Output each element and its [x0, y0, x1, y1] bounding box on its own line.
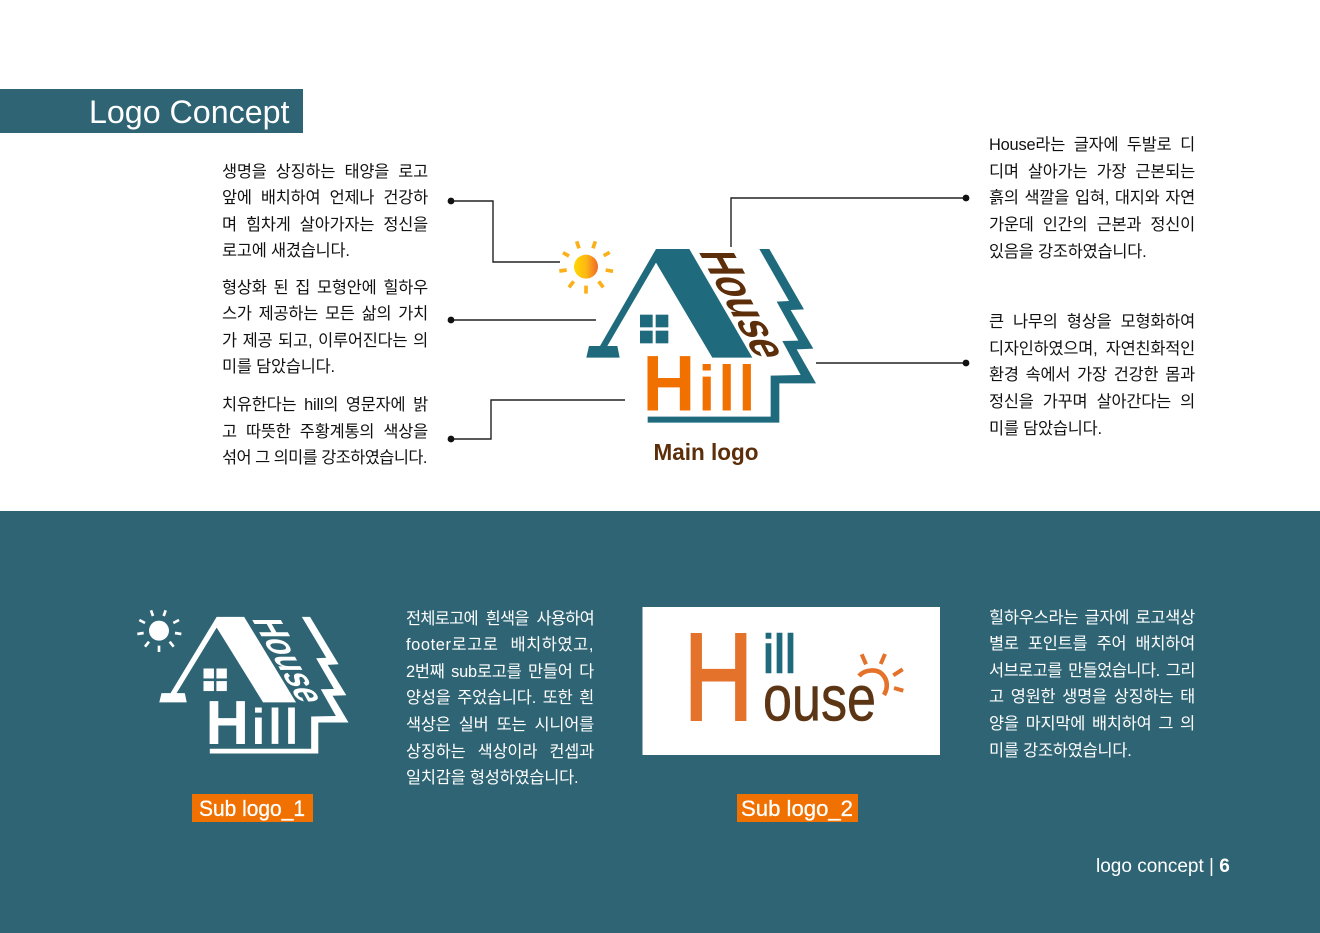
text block: sub logo 1 description: footer로고로 배치하였고,	[406, 636, 594, 654]
Hill wordmark: H	[643, 340, 695, 428]
text block: tree shape meaning: 정신을 가꾸며 살아간다는 의	[989, 393, 1195, 411]
text block: house lettering meaning: 흙의 색깔을 입혀, 대지와 자연	[989, 189, 1195, 207]
footer: page label and number: logo concept | 6	[1096, 856, 1230, 876]
text block: tree shape meaning: 디자인하였으며, 자연친화적인	[989, 340, 1195, 358]
text block: hill meaning: 고 따뜻한 주황계통의 색상을	[222, 423, 428, 441]
title banner: Logo Concept	[89, 94, 289, 130]
white Hill wordmark: H	[206, 688, 249, 757]
label: Sub logo_1: Sub logo_1	[199, 796, 305, 821]
text block: sub logo 1 description: 전체로고에 흰색을 사용하여	[406, 610, 594, 628]
text block: sub logo 2 description: 별로 포인트를 주어 배치하여	[989, 635, 1195, 653]
text block: sun meaning	[222, 163, 428, 260]
text block: house shape meaning: 스가 제공하는 모든 삶의 가치	[222, 305, 428, 323]
text block: tree shape meaning	[989, 313, 1195, 438]
text block: sub logo 2 description: 힐하우스라는 글자에 로고색상	[989, 609, 1195, 627]
label: Sub logo_2: Sub logo_2	[741, 796, 853, 821]
white Hill wordmark: ill	[252, 698, 298, 755]
text block: house lettering meaning	[989, 136, 1195, 261]
title banner	[0, 89, 303, 133]
text block: sub logo 1 description: 색상은 실버 또는 시니어를	[406, 716, 594, 734]
text block: hill meaning	[222, 396, 428, 467]
ill letters: ill	[763, 625, 796, 685]
text block: sub logo 1 description: 양성을 주었습니다. 또한 흰	[406, 689, 594, 707]
text block: house lettering meaning: 디며 살아가는 가장 근본되는	[989, 163, 1195, 181]
orange sun arc and rays	[859, 654, 903, 695]
text block: sun meaning: 앞에 배치하여 언제나 건강하	[222, 189, 428, 207]
text block: sub logo 1 description: 일치감을 형성하였습니다.	[406, 769, 578, 787]
panel: sub logo 2 white card	[642, 607, 940, 755]
connector: tree shape	[816, 360, 969, 366]
text block: sub logo 2 description: 미를 강조하였습니다.	[989, 742, 1132, 760]
icon: main logo	[559, 241, 816, 428]
tree-shaped right wall	[648, 249, 816, 423]
text block: sun meaning: 로고에 새겼습니다.	[222, 242, 350, 260]
icon: sun	[559, 241, 613, 294]
H letter: H	[684, 610, 753, 746]
text block: house lettering meaning: 가운데 인간의 근본과 정신이	[989, 216, 1195, 234]
ouse letters: ouse	[763, 662, 876, 734]
text block: tree shape meaning: 큰 나무의 형상을 모형화하여	[989, 313, 1195, 331]
panel: bottom teal section	[0, 511, 1320, 933]
white roof	[159, 617, 296, 702]
text block: sub logo 2 description	[989, 609, 1195, 760]
label: Main logo: Main logo	[654, 439, 758, 465]
window	[640, 315, 668, 343]
icon: sub logo 2	[684, 610, 903, 746]
text block: hill meaning: 섞어 그 의미를 강조하였습니다.	[222, 449, 427, 467]
icon: white sun	[137, 610, 181, 652]
text block: tree shape meaning: 미를 담았습니다.	[989, 420, 1102, 438]
Hill wordmark: ill	[698, 354, 755, 425]
text block: sun meaning: 생명을 상징하는 태양을 로고	[222, 163, 428, 181]
text block: house shape meaning: 가 제공 되고, 이루어진다는 의	[222, 332, 428, 350]
text block: sub logo 2 description: 양을 마지막에 배치하여 그 의	[989, 715, 1195, 733]
connector: sun	[448, 198, 560, 262]
text block: sub logo 2 description: 고 영원한 생명을 상징하는 태	[989, 688, 1195, 706]
text block: hill meaning: 치유한다는 hill의 영문자에 밝	[222, 396, 428, 414]
roof and left wall	[586, 249, 752, 358]
white tree wall	[210, 617, 349, 753]
connector: house lettering	[731, 195, 969, 247]
text block: house shape meaning: 미를 담았습니다.	[222, 358, 335, 376]
text block: sun meaning: 며 힘차게 살아가자는 정신을	[222, 216, 428, 234]
text block: sub logo 1 description	[406, 610, 594, 787]
white window	[203, 669, 227, 691]
text block: house lettering meaning: House라는 글자에 두발로 디	[989, 136, 1195, 154]
white House wordmark: House	[242, 618, 336, 703]
text block: house shape meaning: 형상화 된 집 모형안에 힐하우	[222, 279, 428, 297]
text block: sub logo 1 description: 상징하는 색상이라 컨셉과	[406, 743, 594, 761]
text block: house shape meaning	[222, 279, 428, 376]
icon: sub logo 1	[137, 610, 349, 757]
text block: sub logo 2 description: 서브로고를 만들었습니다. 그리	[989, 662, 1195, 680]
connector: house shape	[448, 317, 596, 323]
text block: tree shape meaning: 환경 속에서 가장 건강한 몸과	[989, 366, 1195, 384]
text block: house lettering meaning: 있음을 강조하였습니다.	[989, 243, 1147, 261]
House wordmark: House	[687, 251, 801, 358]
text block: sub logo 1 description: 2번째 sub로고를 만들어 다	[406, 663, 594, 681]
connector: hill	[448, 400, 625, 442]
